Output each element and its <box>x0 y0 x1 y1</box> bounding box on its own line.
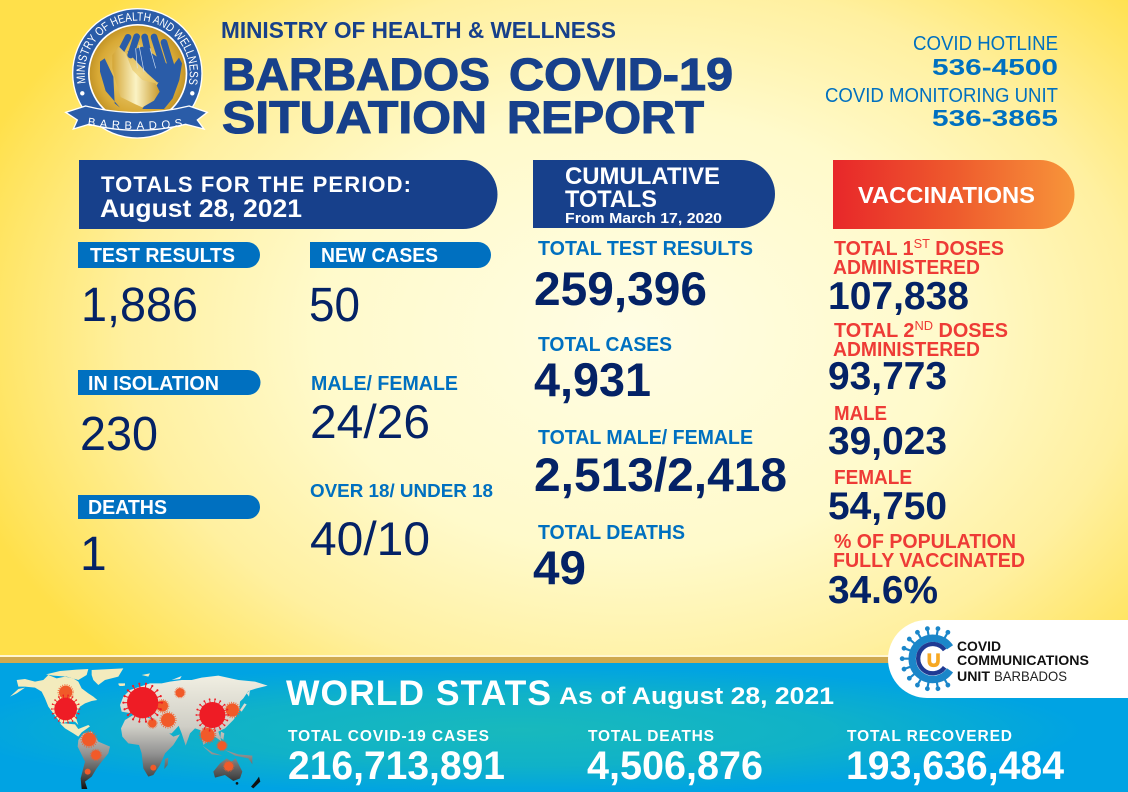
ministry logo <box>64 8 209 139</box>
first doses: DOSES <box>930 238 1004 260</box>
deaths <box>78 495 260 581</box>
second doses: 93,773 <box>828 355 947 398</box>
main title line 1 <box>222 49 733 100</box>
header title <box>221 17 733 143</box>
total recovered: 193,636,484 <box>846 744 1064 788</box>
new cases: 50 <box>309 279 360 332</box>
female vaccinated: 54,750 <box>828 485 947 528</box>
total test results: 259,396 <box>534 262 707 315</box>
main title line 2: REPORT <box>507 92 704 143</box>
first doses: ST <box>914 236 930 251</box>
total deaths: 4,506,876 <box>587 744 763 788</box>
in isolation: IN ISOLATION <box>88 373 219 395</box>
total deaths: TOTAL DEATHS <box>538 522 685 544</box>
total covid-19 cases: TOTAL COVID-19 CASES <box>288 728 489 745</box>
vaccinations header <box>833 160 1074 229</box>
world stats heading: As of August 28, 2021 <box>559 683 834 710</box>
new cases <box>309 242 491 332</box>
world map with virus markers <box>10 668 268 789</box>
deaths: DEATHS <box>88 497 167 519</box>
over under 18 <box>310 480 493 565</box>
contact numbers: 536-4500 <box>932 54 1058 80</box>
cumulative header: From March 17, 2020 <box>565 211 722 227</box>
in isolation: 230 <box>80 408 158 461</box>
male vaccinated: MALE <box>834 403 887 425</box>
male female: 24/26 <box>310 395 430 448</box>
over under 18: OVER 18/ UNDER 18 <box>310 480 493 501</box>
total deaths: 49 <box>533 541 586 594</box>
main title line 1: BARBADOS <box>222 49 490 100</box>
world stats heading <box>286 673 834 713</box>
deaths: 1 <box>80 528 107 581</box>
ministry logo: BARBADOS <box>88 118 182 130</box>
test results <box>78 242 260 332</box>
totals header: August 28, 2021 <box>100 195 302 223</box>
vaccinations header: VACCINATIONS <box>858 182 1035 208</box>
contact numbers <box>825 33 1058 131</box>
total male female: TOTAL MALE/ FEMALE <box>538 427 753 449</box>
main title line 1: COVID-19 <box>509 49 733 100</box>
total deaths <box>533 522 685 594</box>
first doses: 107,838 <box>828 275 969 318</box>
total deaths: TOTAL DEATHS <box>588 728 714 745</box>
test results: 1,886 <box>81 279 198 332</box>
percent fully vaccinated: 34.6% <box>828 569 938 612</box>
total test results <box>534 238 753 315</box>
total recovered: TOTAL RECOVERED <box>847 728 1012 745</box>
male female <box>310 373 458 448</box>
test results: TEST RESULTS <box>90 245 235 267</box>
total cases <box>534 334 672 406</box>
second doses: DOSES <box>933 320 1008 342</box>
contact numbers: 536-3865 <box>932 105 1058 131</box>
second doses <box>828 318 1008 398</box>
contact numbers: COVID MONITORING UNIT <box>825 85 1058 107</box>
main title line 2 <box>222 92 704 143</box>
panel: world stats <box>0 655 1128 792</box>
second doses: ADMINISTERED <box>833 339 980 361</box>
first doses: ADMINISTERED <box>833 257 980 279</box>
over under 18: 40/10 <box>310 512 430 565</box>
total cases: 4,931 <box>534 353 651 406</box>
covid communications unit logo: COMMUNICATIONS <box>957 652 1089 668</box>
first doses: TOTAL 1 <box>834 238 915 260</box>
male female: MALE/ FEMALE <box>311 373 458 395</box>
percent fully vaccinated: % OF POPULATION <box>834 531 1016 553</box>
first doses <box>828 236 1004 318</box>
contact numbers: COVID HOTLINE <box>913 33 1058 55</box>
covid communications unit logo <box>888 620 1128 698</box>
cumulative header: TOTALS <box>565 186 657 213</box>
total covid-19 cases: 216,713,891 <box>288 744 505 788</box>
panel: vaccinations <box>828 160 1074 612</box>
female vaccinated: FEMALE <box>834 467 912 489</box>
second doses: ND <box>914 318 933 333</box>
total male female: 2,513/2,418 <box>534 448 787 501</box>
male vaccinated: 39,023 <box>828 420 947 463</box>
total cases: TOTAL CASES <box>538 334 672 356</box>
covid communications unit logo: UNIT <box>957 668 990 684</box>
in isolation <box>78 370 260 461</box>
ministry logo: MINISTRY OF HEALTH AND WELLNESS <box>76 12 198 85</box>
total test results: TOTAL TEST RESULTS <box>538 238 753 260</box>
covid communications unit logo: BARBADOS <box>994 668 1067 684</box>
ministry name: MINISTRY OF HEALTH & WELLNESS <box>221 17 616 43</box>
panel: cumulative totals <box>533 160 787 594</box>
percent fully vaccinated: FULLY VACCINATED <box>833 550 1025 572</box>
new cases: NEW CASES <box>321 245 438 267</box>
totals header: TOTALS FOR THE PERIOD: <box>101 172 411 197</box>
panel: totals for the period <box>78 160 498 581</box>
totals header <box>79 160 498 229</box>
world stats heading: WORLD STATS <box>286 673 551 713</box>
covid communications unit logo: COVID <box>957 638 1001 654</box>
second doses: TOTAL 2 <box>834 320 915 342</box>
cumulative header <box>533 160 775 228</box>
cumulative header: CUMULATIVE <box>565 163 720 190</box>
percent fully vaccinated <box>828 531 1025 612</box>
main title line 2: SITUATION <box>222 92 487 143</box>
